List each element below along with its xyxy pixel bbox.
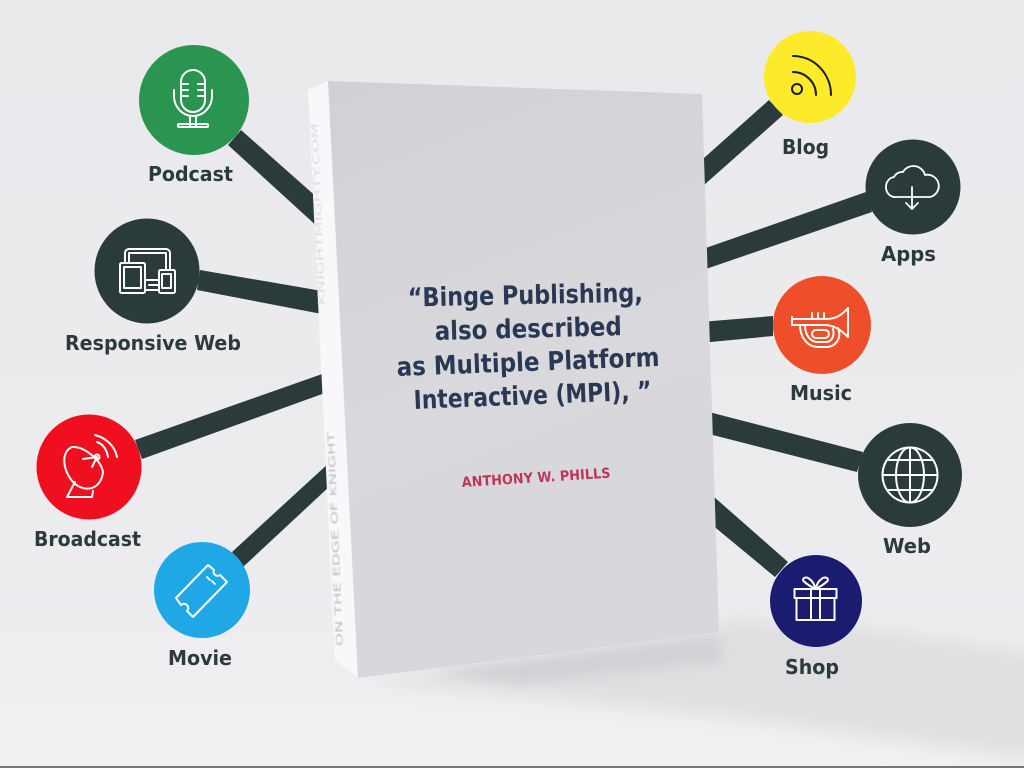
quote text: Interactive (MPI), ”: [413, 376, 652, 416]
connector: music: [700, 316, 773, 343]
spine text: website: KNIGHTMIGHTY.COM: [310, 123, 328, 305]
icon: devices: [120, 249, 175, 293]
label: podcast: Podcast: [148, 162, 233, 186]
quote text: also described: [434, 312, 622, 347]
node: music: [773, 276, 871, 405]
icon: microphone: [174, 70, 212, 127]
icon: trumpet: [792, 308, 848, 347]
icon: satellite dish: [64, 435, 117, 497]
icon: ticket: [176, 565, 227, 617]
icon: rss feed: [792, 56, 831, 95]
connector: broadcast: [135, 373, 325, 459]
icon: globe: [882, 448, 938, 502]
label: shop: Shop: [785, 655, 839, 679]
node: apps: [866, 140, 960, 266]
quote author: ANTHONY W. PHILLS: [461, 466, 611, 491]
node: shop: [770, 555, 862, 679]
book: [308, 81, 719, 678]
node: responsive web: [65, 218, 241, 355]
connector: blog: [695, 100, 783, 193]
label: movie: Movie: [168, 646, 232, 670]
icon: gift: [794, 578, 836, 620]
label: broadcast: Broadcast: [34, 527, 141, 551]
label: apps: Apps: [881, 242, 936, 266]
node: podcast: [139, 45, 249, 186]
connector: web: [705, 411, 863, 472]
spine text: book title: ON THE EDGE OF KNIGHT: [326, 431, 346, 646]
connector: apps: [700, 192, 872, 271]
book contact shadow: [430, 634, 722, 684]
connector: movie: [232, 462, 330, 567]
connector: shop: [705, 489, 788, 577]
node: web: [858, 423, 962, 558]
label: music: Music: [790, 381, 852, 405]
quote text: [396, 279, 660, 416]
connector: podcast: [228, 130, 320, 229]
connector: responsive web: [197, 270, 322, 314]
label: responsive web: Responsive Web: [65, 331, 241, 355]
node: movie: [154, 542, 250, 670]
node: broadcast: [34, 414, 142, 551]
book spine: [308, 81, 358, 678]
floor shadow: [358, 618, 1024, 768]
icon: cloud download: [886, 166, 939, 209]
label: web: Web: [883, 534, 931, 558]
quote text: as Multiple Platform: [396, 343, 660, 383]
node: blog: [764, 31, 856, 159]
label: blog: Blog: [782, 135, 829, 159]
quote text: “Binge Publishing,: [408, 279, 643, 313]
book cover: [328, 81, 719, 678]
bottom edge line: [0, 766, 1024, 768]
